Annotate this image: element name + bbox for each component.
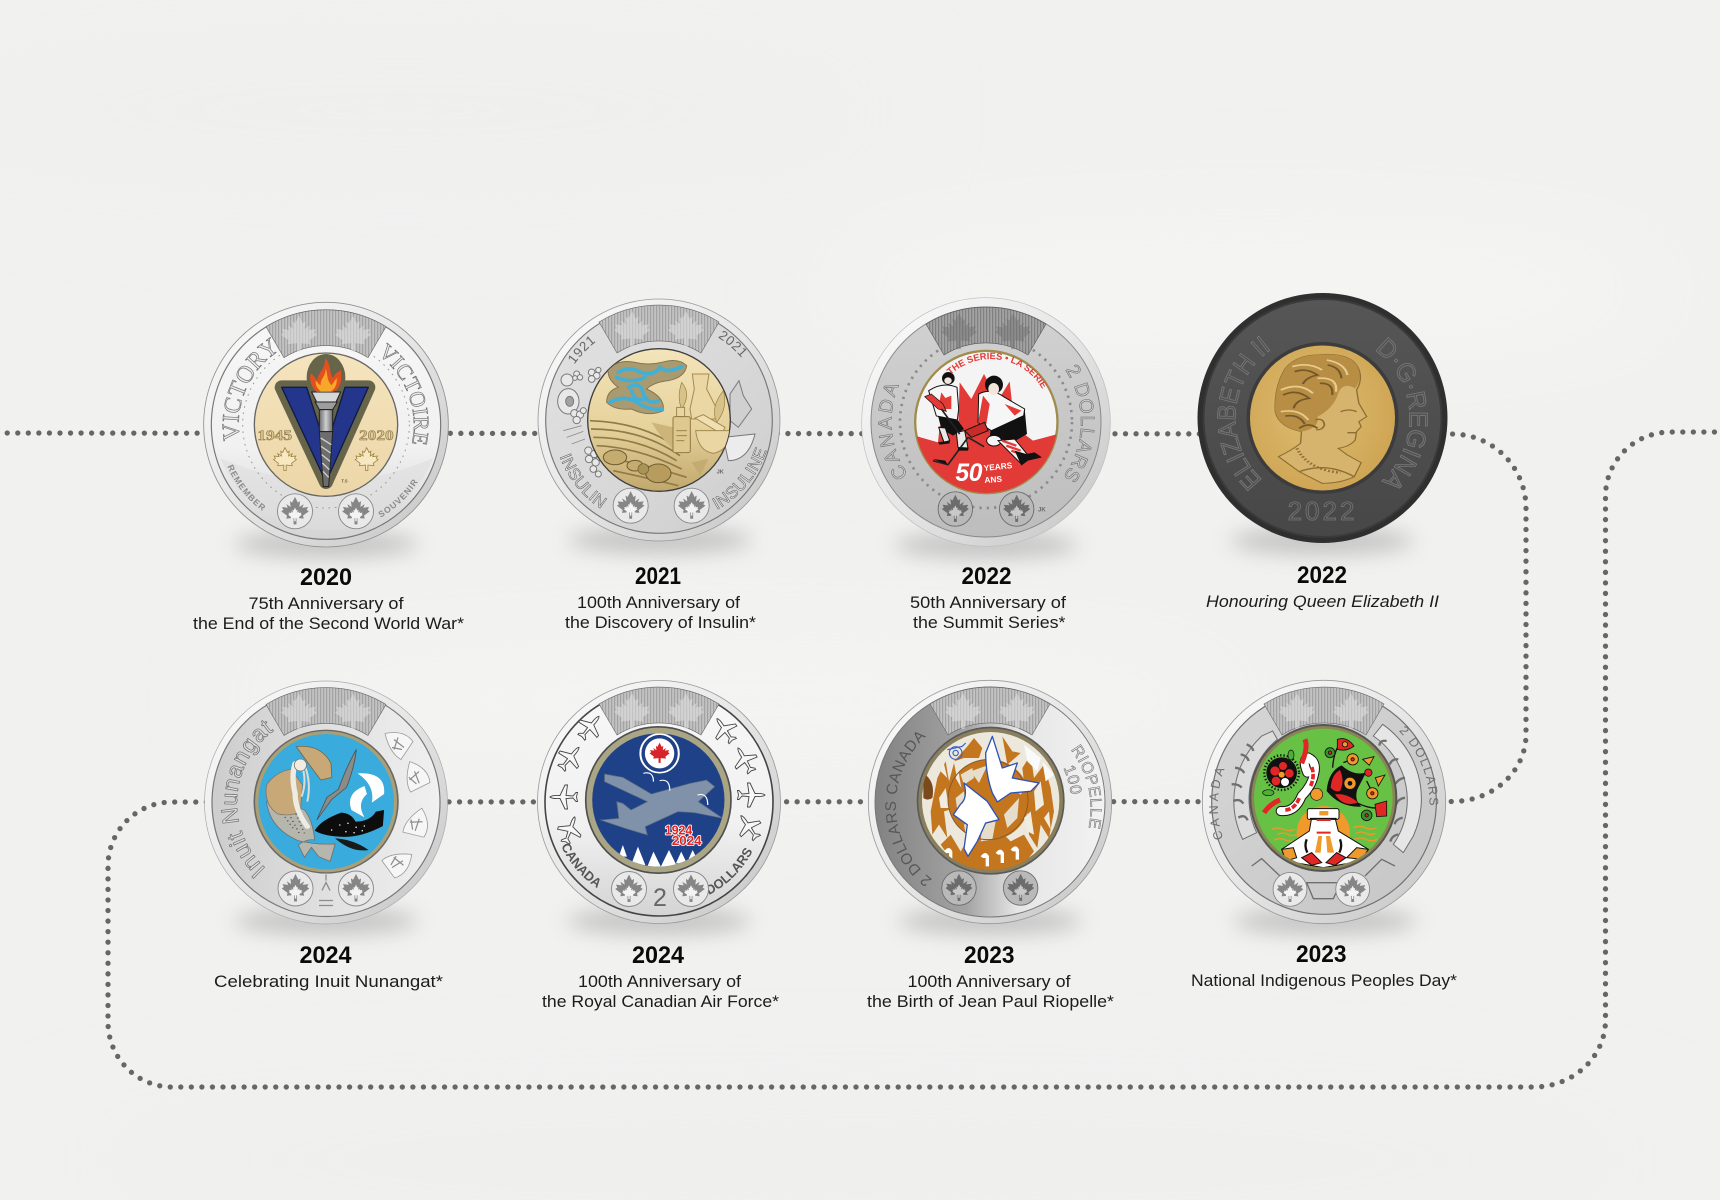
caption: 2022 Summit: 50th Anniversary of (910, 593, 1066, 612)
flame (310, 358, 341, 392)
caption: 2023 Riopelle: 2023 (964, 942, 1014, 969)
caption: 2021: 100th Anniversary of (577, 593, 740, 612)
narwhal (317, 749, 356, 820)
gold centre (1246, 342, 1398, 494)
ring lettering: 2 DOLLARS (1064, 364, 1095, 482)
coin: 2021 Insulin: 2021 (718, 331, 746, 358)
coin: 2024 Royal Canadian Air Force: 2 (653, 884, 667, 912)
50 years: 50 (955, 460, 983, 487)
dates: 2024 (672, 834, 702, 849)
coin: 2020 Victory: REMEMBER (228, 464, 265, 511)
ring lettering: INSULINE (712, 447, 767, 510)
coin: 2020 Victory: T.S (341, 478, 348, 483)
coin: 2023 Jean Paul Riopelle: 100 (1064, 766, 1082, 794)
ring decorative panels (1232, 724, 1421, 899)
ring lettering: Inuit Nunangat (220, 720, 274, 879)
arc title: THE SERIES • LA SÉRIE (946, 352, 1047, 389)
caption: 2022 Summit (910, 563, 1066, 632)
ring lettering: CANADA (562, 844, 600, 888)
char fish (335, 838, 369, 850)
ring lettering: CANADA (878, 385, 906, 480)
ear, necklace, drape (1315, 419, 1324, 430)
caption: 2021 (565, 563, 756, 632)
roundel (640, 734, 679, 773)
ring lettering: INSULIN (560, 453, 608, 508)
orange sun (1296, 806, 1350, 838)
ring lettering (222, 336, 429, 445)
ring lettering: 2 DOLLARS (1399, 726, 1438, 805)
V emblem (282, 387, 368, 482)
vial (677, 407, 685, 417)
walrus (296, 746, 332, 780)
coin: 2020 Victory: SOUVENIR (378, 480, 418, 517)
caption: 2022 Summit: 2022 (962, 563, 1012, 590)
mortar (695, 415, 725, 434)
caption: 2024 Air Force: 100th Anniversary of (578, 972, 741, 991)
dotted timeline path (0, 432, 1720, 1087)
coin: 2020 Victory (203, 302, 449, 548)
caption: 2024 Air Force (542, 942, 779, 1011)
caption: 2023 Indigenous Peoples Day: National Indigenous Peoples Day* (1191, 971, 1457, 990)
gold maple leaves (274, 448, 296, 470)
enamel centre (917, 727, 1065, 875)
coin: 2021 Insulin (538, 298, 780, 542)
coin: 2021 Insulin: JK (717, 469, 725, 475)
ring lettering: CANADA (1209, 769, 1224, 840)
caption: 2022 Elizabeth: 2022 (1297, 562, 1347, 589)
orange bud (1311, 788, 1323, 800)
enamel centre (585, 726, 732, 874)
small blossoms and stems (1333, 748, 1380, 808)
caption: 2022 Elizabeth (1206, 562, 1439, 611)
caption: 2023 Indigenous Peoples Day (1191, 941, 1457, 990)
ring fan icons (378, 732, 434, 881)
bearded seal (267, 802, 335, 861)
ring lettering: ELIZABETH II (1217, 336, 1270, 492)
ring lettering (556, 445, 771, 513)
coin shadows (234, 526, 1417, 935)
ring lettering (1207, 723, 1441, 842)
coin: 2022 Queen Elizabeth II: 2022 (1288, 496, 1357, 526)
enamel centre (253, 730, 399, 874)
ring lettering: DOLLARS (708, 848, 752, 895)
parka diamonds (1282, 848, 1368, 861)
ring lettering (1211, 330, 1434, 498)
ring relief: berries and cells (558, 367, 755, 477)
ring lettering: 2 DOLLARS CANADA (885, 732, 932, 886)
flask (690, 374, 718, 419)
dates: 1945 (257, 428, 292, 444)
caption: 2022 Summit: the Summit Series* (913, 613, 1066, 632)
coin: 2024 Royal Canadian Air Force (537, 680, 781, 924)
flowing hair (293, 763, 307, 827)
feathers (1302, 739, 1306, 763)
torch (312, 392, 341, 402)
hair (1275, 354, 1360, 432)
gold centre (254, 352, 398, 497)
caption: 2024 Air Force: the Royal Canadian Air Force* (542, 992, 779, 1011)
caption: 2020 (193, 564, 464, 633)
medallions (277, 494, 312, 529)
caption: 2020: 2020 (300, 564, 352, 591)
tree line (619, 845, 698, 867)
dates (665, 824, 702, 849)
caption: 2024 Nunangat: Celebrating Inuit Nunangat* (214, 972, 443, 991)
aircraft (600, 774, 723, 835)
caption: 2023 Indigenous Peoples Day: 2023 (1296, 941, 1346, 968)
coin: 2023 Jean Paul Riopelle (868, 680, 1112, 924)
caption: 2024 Nunangat (214, 942, 443, 991)
blue signature mark (947, 743, 966, 759)
effigy of the Queen (1275, 354, 1367, 483)
ring lettering: VICTOIRE (382, 342, 429, 445)
coin: 2023 National Indigenous Peoples Day (1202, 680, 1446, 924)
caption: 2020: 75th Anniversary of (248, 594, 404, 613)
caption: 2024 Nunangat: 2024 (300, 942, 352, 969)
beans and berries (603, 450, 627, 465)
caption: 2024 Air Force: 2024 (632, 942, 685, 969)
coin: 2022 Summit Series: YEARS (983, 460, 1013, 473)
field lines (590, 421, 687, 486)
gold centre (587, 348, 731, 492)
caption: 2023 Riopelle: 100th Anniversary of (908, 972, 1071, 991)
black flower (1266, 757, 1297, 788)
dates: 1924 (665, 824, 693, 838)
coin: 2022 Summit Series: JK (1038, 507, 1046, 513)
orange painted texture (948, 759, 1030, 840)
enamel centre (1249, 724, 1397, 872)
ring planes (550, 709, 767, 847)
coin: 2021 Insulin: 1921 (568, 336, 596, 364)
belugas (358, 773, 384, 803)
parka (1282, 818, 1368, 868)
leaf stems (679, 382, 687, 409)
caption: 2022 Elizabeth: Honouring Queen Elizabeth II (1206, 592, 1439, 611)
caption: 2023 Riopelle (867, 942, 1114, 1011)
ring lettering: D·G·REGINA (1376, 337, 1428, 488)
parka figure (266, 769, 302, 815)
ribbon (1281, 758, 1315, 811)
left player (938, 416, 964, 436)
coin: 2022 Summit Series (861, 297, 1111, 546)
right player (990, 409, 1027, 441)
water lines (1272, 826, 1377, 841)
coin: 2023 Jean Paul Riopelle: RIOPELLE (1071, 744, 1102, 829)
ring lettering (876, 361, 1097, 487)
coin: 2022 Queen Elizabeth II (1198, 293, 1448, 543)
caption: 2021: the Discovery of Insulin* (565, 613, 756, 632)
ring lettering (558, 840, 756, 898)
large red flower (1327, 765, 1366, 807)
caption: 2023 Riopelle: the Birth of Jean Paul Riopelle* (867, 992, 1114, 1011)
ringed seal (315, 810, 384, 837)
doves (986, 736, 1039, 802)
coin: 2024 Inuit Nunangat (204, 681, 448, 924)
coin: 2022 Summit Series: ANS (984, 474, 1003, 485)
coin: 2020 Victory: 2020 (359, 428, 394, 444)
ring lettering: VICTORY (222, 336, 277, 442)
caption: 2021: 2021 (635, 563, 681, 590)
caption: 2020: the End of the Second World War* (193, 614, 464, 633)
enamel centre (914, 350, 1059, 494)
